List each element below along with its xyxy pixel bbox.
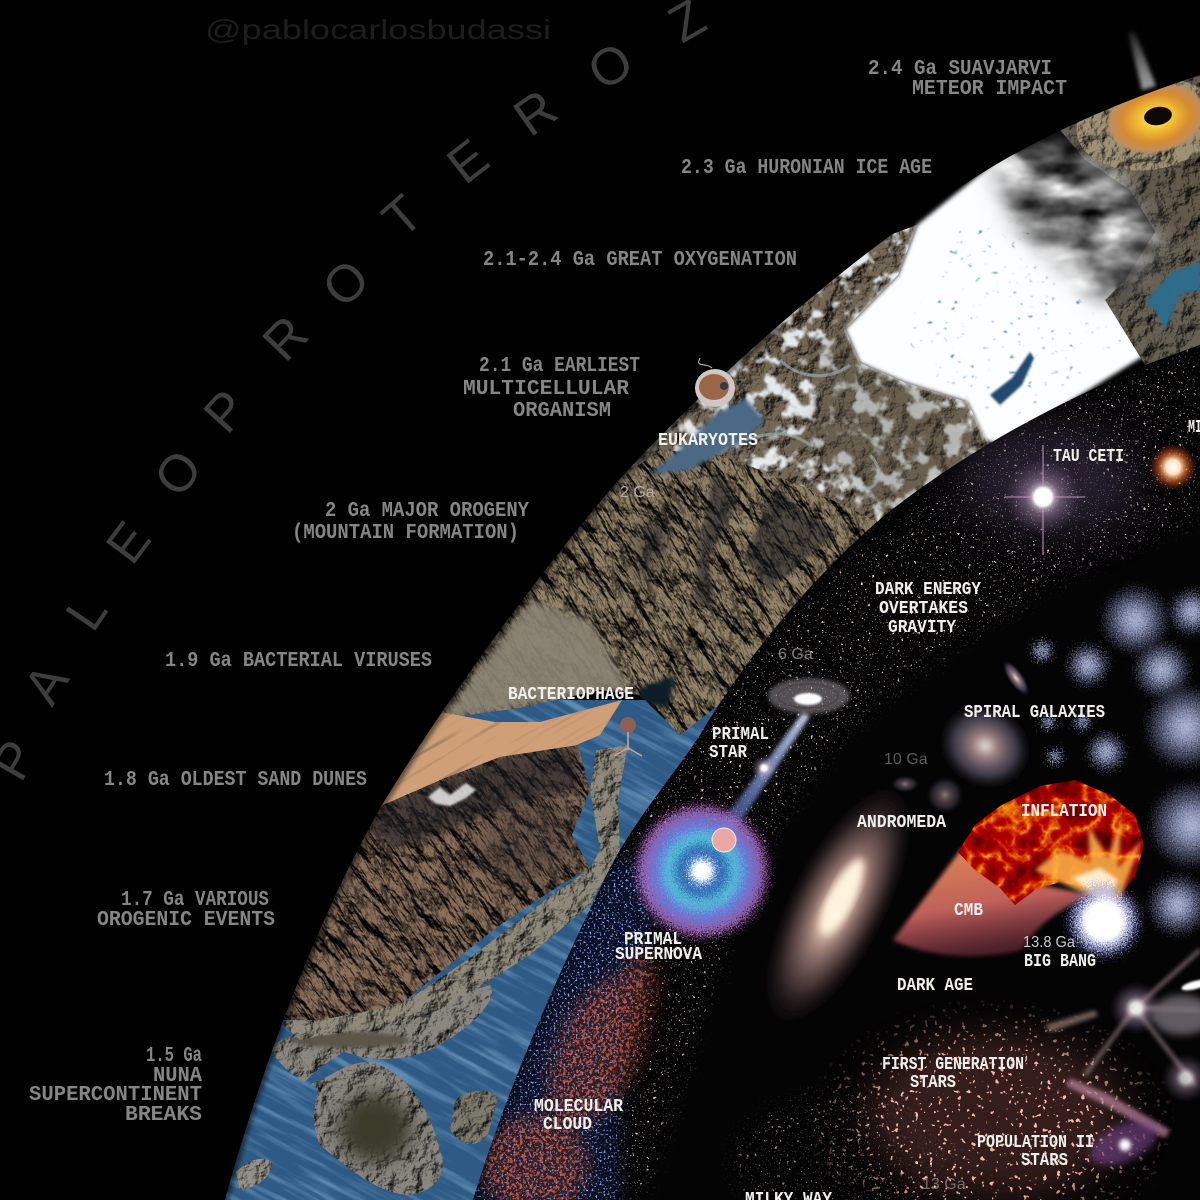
object labels on the image: STARS bbox=[1021, 1151, 1068, 1171]
primal star bbox=[752, 756, 776, 779]
event labels: left column: SUPERCONTINENT bbox=[29, 1084, 202, 1107]
ocean bbox=[225, 489, 719, 1200]
ice sheet bbox=[845, 150, 1145, 445]
brown mountain range bbox=[284, 745, 590, 1020]
dark impact smoke bbox=[1012, 186, 1151, 286]
object labels on the image: POPULATION II bbox=[977, 1133, 1094, 1153]
object labels on the image: BACTERIOPHAGE bbox=[508, 685, 634, 705]
event labels: left column: ORGANISM bbox=[513, 400, 611, 423]
event labels: left column: BREAKS bbox=[125, 1104, 202, 1127]
primal star galaxy bbox=[768, 678, 850, 714]
object labels on the image: PRIMAL bbox=[624, 930, 682, 950]
age markers: 13 Ga bbox=[922, 1176, 966, 1193]
molecular cloud bbox=[474, 846, 668, 1200]
event labels: left column: 1.7 Ga VARIOUS bbox=[121, 889, 269, 912]
era title: PALEOPROTEROZOIC: P bbox=[193, 379, 259, 444]
object labels on the image: SUPERNOVA bbox=[615, 945, 702, 965]
meteor trail bbox=[1128, 32, 1156, 90]
object labels on the image: TAU CETI bbox=[1053, 447, 1124, 467]
age markers bbox=[620, 484, 1075, 1193]
event labels: left column: 2 Ga MAJOR OROGENY bbox=[325, 500, 529, 523]
object labels on the image: DARK AGE bbox=[897, 976, 973, 996]
population flares bbox=[1045, 950, 1200, 1175]
object labels on the image: OVERTAKES bbox=[879, 599, 968, 619]
blue-grey early galaxies bbox=[1029, 582, 1200, 939]
supernova bbox=[630, 799, 774, 943]
pale plain bbox=[440, 600, 630, 720]
icon: bacteriophage bbox=[614, 717, 642, 756]
age markers: 2 Ga bbox=[620, 484, 655, 501]
era title: PALEOPROTEROZOIC: E bbox=[437, 128, 500, 195]
fjord coast with glaciers bbox=[622, 225, 990, 522]
era title: PALEOPROTEROZOIC: O bbox=[143, 440, 214, 508]
terrain around crater bbox=[1060, 70, 1200, 240]
small galaxy bbox=[1004, 662, 1028, 694]
era title: PALEOPROTEROZOIC: O bbox=[578, 31, 643, 102]
era title: PALEOPROTEROZOIC: R bbox=[252, 305, 320, 372]
age markers: 13.8 Ga bbox=[1023, 934, 1075, 951]
object labels on the image: CMB bbox=[954, 901, 983, 921]
sand dunes bbox=[379, 700, 622, 810]
era title: PALEOPROTEROZOIC: E bbox=[95, 512, 162, 574]
object labels on the image: INFLATION bbox=[1021, 802, 1107, 822]
snow cap on range bbox=[428, 783, 476, 806]
meteor crater bbox=[1076, 80, 1200, 171]
dusty purple haze near Tau Ceti bbox=[960, 425, 1140, 535]
event labels: left column: 2.1 Ga EARLIEST bbox=[479, 355, 640, 378]
watermark: @pablocarlosbudassi bbox=[205, 14, 551, 45]
object labels on the image: STAR bbox=[709, 743, 747, 763]
event labels: left column: OROGENIC EVENTS bbox=[97, 909, 275, 932]
spiral galaxy bbox=[942, 706, 1028, 786]
nuna island land bbox=[236, 985, 498, 1195]
object labels on the image: ANDROMEDA bbox=[857, 813, 946, 833]
star field bbox=[450, 330, 1200, 1200]
event labels: left column: MULTICELLULAR bbox=[463, 378, 629, 401]
object labels on the image: STARS bbox=[910, 1073, 956, 1093]
age markers: 6 Ga bbox=[778, 646, 813, 663]
era title: PALEOPROTEROZOIC: O bbox=[312, 249, 381, 319]
object labels on the image: MOLECULAR bbox=[534, 1097, 623, 1117]
first generation star cluster bbox=[800, 1000, 1180, 1200]
event labels: left column: 1.8 Ga OLDEST SAND DUNES bbox=[104, 769, 367, 792]
earth band: geological terrain bbox=[225, 75, 1200, 1200]
era title: PALEOPROTEROZOIC bbox=[0, 0, 716, 790]
big bang bbox=[1064, 881, 1144, 961]
event labels: left column bbox=[29, 58, 1067, 1127]
deep space panel bbox=[450, 330, 1200, 1200]
era title: PALEOPROTEROZOIC: R bbox=[504, 79, 568, 148]
object labels on the image bbox=[508, 418, 1200, 1200]
event labels: left column: 2.1-2.4 Ga GREAT OXYGENATION bbox=[483, 249, 797, 272]
event labels: left column: METEOR IMPACT bbox=[912, 78, 1067, 101]
era title: PALEOPROTEROZOIC: L bbox=[55, 584, 119, 641]
inflation bbox=[958, 780, 1144, 905]
event labels: left column: 2.3 Ga HURONIAN ICE AGE bbox=[681, 157, 932, 180]
object labels on the image: DARK ENERGY bbox=[875, 580, 981, 600]
faint galaxies near 10 Ga bbox=[892, 776, 962, 812]
object labels on the image: SPIRAL GALAXIES bbox=[964, 703, 1105, 723]
object labels on the image: PRIMAL bbox=[712, 725, 769, 745]
object labels on the image: EUKARYOTES bbox=[658, 431, 758, 451]
CMB bbox=[893, 848, 1092, 956]
impact cloud bbox=[1000, 145, 1160, 300]
desert mountain (2 Ga orogeny) bbox=[438, 444, 878, 735]
event labels: left column: (MOUNTAIN FORMATION) bbox=[292, 522, 519, 545]
far land and water bbox=[1105, 232, 1200, 365]
larger stars bbox=[450, 330, 1200, 1200]
orange star bbox=[1149, 443, 1197, 491]
object labels on the image: CLOUD bbox=[543, 1115, 592, 1135]
era title: PALEOPROTEROZOIC: T bbox=[372, 184, 434, 249]
supernova progenitor star bbox=[712, 828, 736, 852]
Andromeda galaxy bbox=[769, 794, 907, 1016]
event labels: left column: 1.5 Ga bbox=[146, 1045, 202, 1068]
object labels on the image: BIG BANG bbox=[1024, 952, 1096, 972]
icon: eukaryote cell bbox=[695, 358, 735, 407]
event labels: left column: NUNA bbox=[153, 1065, 202, 1088]
coastal flats bbox=[280, 745, 628, 1040]
object labels on the image: FIRST GENERATION bbox=[882, 1055, 1024, 1075]
age markers: 10 Ga bbox=[884, 751, 928, 768]
event labels: left column: 2.4 Ga SUAVJARVI bbox=[868, 58, 1052, 81]
Tau Ceti star bbox=[1005, 445, 1085, 555]
era title: PALEOPROTEROZOIC: A bbox=[13, 654, 81, 714]
event labels: left column: 1.9 Ga BACTERIAL VIRUSES bbox=[165, 650, 432, 673]
object labels on the image: GRAVITY bbox=[888, 618, 956, 638]
dark limb on band outer edge bbox=[225, 325, 780, 1200]
primal star beam bbox=[716, 712, 810, 838]
dark mountain creases bbox=[635, 468, 835, 612]
